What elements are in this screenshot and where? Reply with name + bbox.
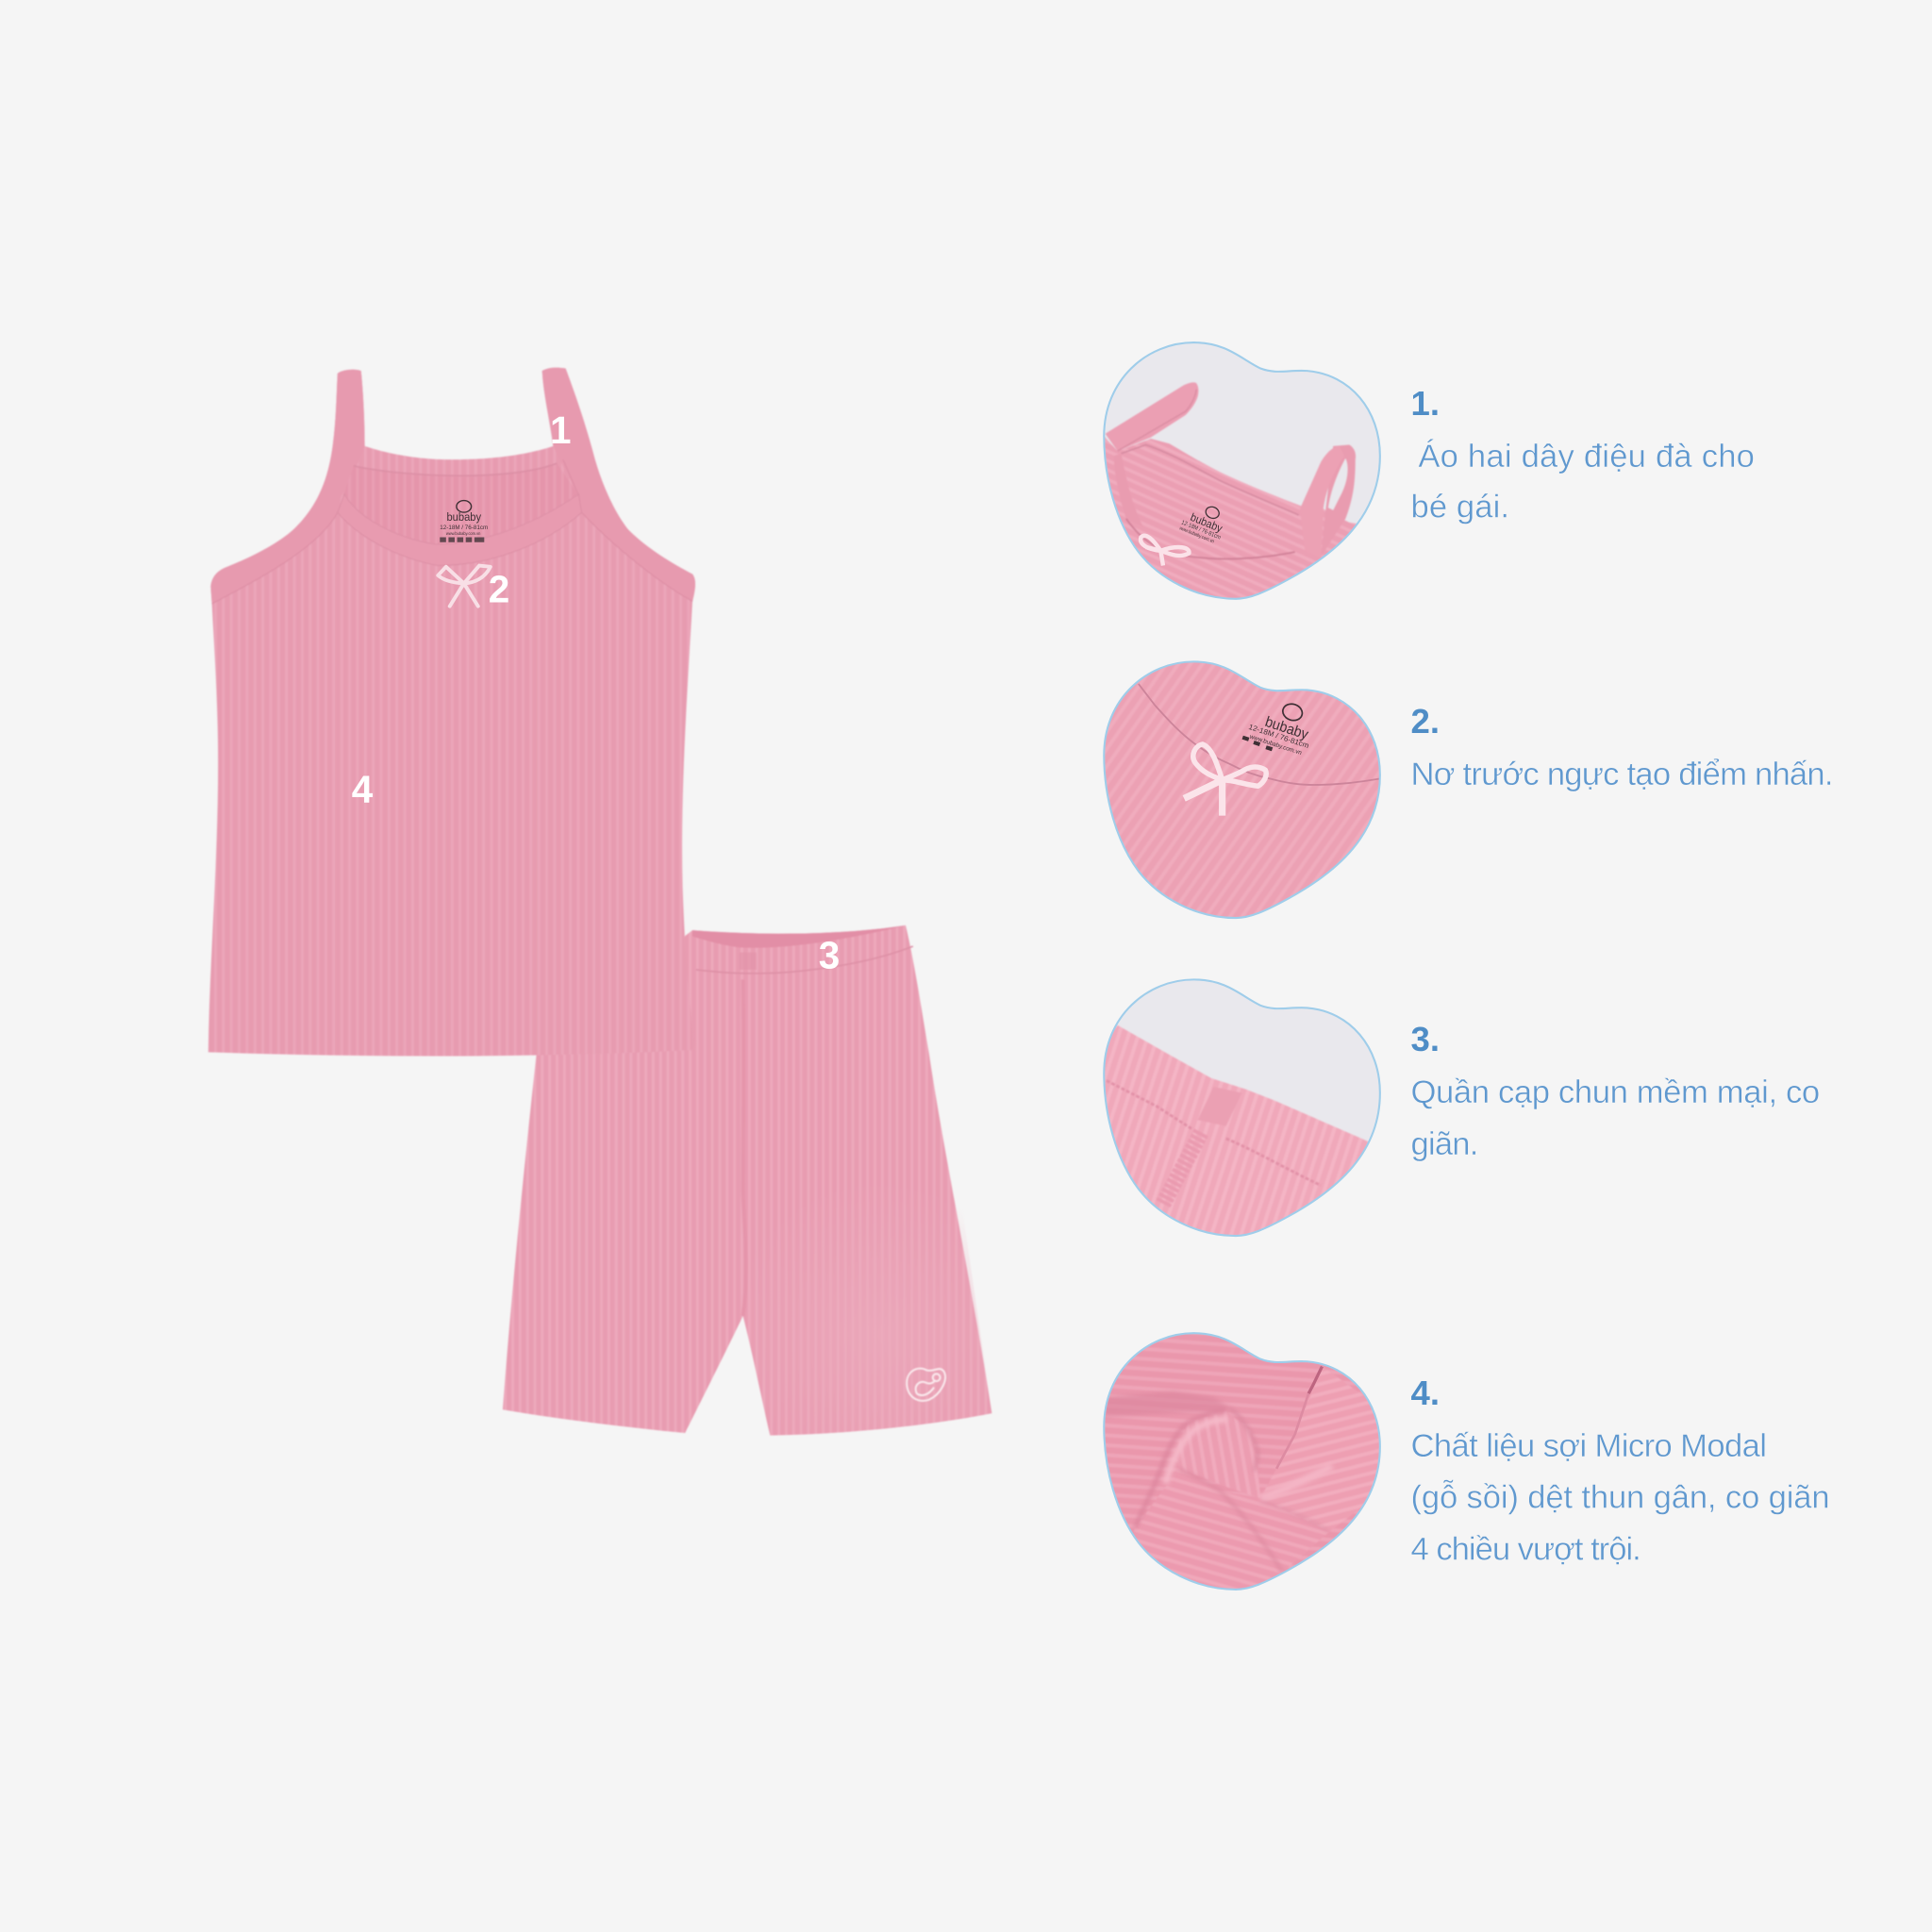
right strap back (1321, 445, 1356, 557)
heart 2: bow detail: bubaby (1263, 714, 1310, 743)
heart 4: fabric swirl (1104, 1333, 1380, 1598)
back waistband (692, 925, 906, 948)
fabric (1104, 436, 1380, 599)
swirl highlights (1260, 1466, 1332, 1498)
heart 1: strap detail (1104, 342, 1380, 599)
center seam (743, 979, 746, 1316)
seam patch (1198, 1087, 1242, 1126)
garment label: bubaby (446, 510, 482, 524)
feature 4 text: Chất liệu sợi Micro Modal (1411, 1428, 1767, 1464)
bow (1193, 744, 1266, 786)
strap gap (1328, 458, 1347, 510)
feature 4 text (1411, 1374, 1830, 1568)
feature 2 text: Nơ trước ngực tạo điểm nhấn. (1411, 757, 1834, 792)
left strap and armhole band (210, 370, 365, 604)
feature 4 text: (gỗ sồi) dệt thun gân, co giãn (1411, 1479, 1830, 1516)
feature 3 text: giãn. (1411, 1126, 1478, 1162)
heart 1: strap detail: 12-18M / 76-81cm (1180, 519, 1222, 541)
icon: bow (438, 566, 491, 607)
heart 2: bow detail (1104, 661, 1380, 918)
feature 3 text (1411, 1020, 1820, 1162)
feature 1 text (1411, 384, 1755, 525)
feature 1 text: 1. (1411, 384, 1440, 423)
feature 3 text: 3. (1411, 1020, 1440, 1058)
label text (1281, 703, 1304, 721)
product marker 3: 3 (819, 934, 840, 977)
right fold (1264, 1372, 1379, 1527)
right strap and armhole band (542, 368, 695, 601)
soft fold shading (1104, 1391, 1332, 1573)
lower fold (1134, 1474, 1327, 1589)
top right crease (1308, 1366, 1322, 1393)
feature 2 text: 2. (1411, 702, 1440, 741)
heart 3: waistband detail (1104, 979, 1380, 1236)
neckline (1139, 684, 1380, 785)
heart 2: bow detail: www.bubaby.com.vn (1248, 733, 1303, 757)
coil highlight (1166, 1420, 1227, 1484)
back neck panel (343, 463, 578, 544)
garment label: www.bubaby.com.vn (446, 531, 481, 536)
side rib band (1114, 455, 1141, 525)
product marker 2: 2 (489, 568, 509, 611)
heart 2: bow detail: 12-18M / 76-81cm (1247, 723, 1310, 750)
front neckline (1126, 519, 1295, 558)
product: camisole top (208, 368, 696, 1057)
crease fade (1276, 1393, 1308, 1469)
neck stitch (1122, 445, 1299, 515)
garment label (440, 501, 488, 542)
front neckline band (338, 494, 581, 566)
feature 1 text: Áo hai dây điệu đà cho (1418, 438, 1755, 475)
left strap (1106, 382, 1198, 451)
centre crease (1230, 1408, 1258, 1472)
lower crease (1179, 1469, 1283, 1573)
icon: shorts logo (907, 1369, 945, 1401)
coil edge (1135, 1411, 1226, 1528)
fabric (1104, 1025, 1380, 1236)
feature 3 text: Quần cạp chun mềm mại, co (1411, 1074, 1820, 1110)
feature 4 text: 4. (1411, 1374, 1440, 1412)
label text (1206, 506, 1220, 519)
bow tails (1184, 780, 1223, 816)
product marker 1: 1 (550, 408, 572, 452)
side seam (1163, 1132, 1201, 1204)
garment label: 12-18M / 76-81cm (440, 525, 488, 531)
back neck stitch (354, 463, 557, 475)
left dark band (1104, 1391, 1230, 1417)
heart 1: strap detail: www.bubaby.com.vn (1178, 525, 1215, 545)
bow (1141, 536, 1189, 566)
product marker 4: 4 (352, 767, 374, 810)
waist seam patch (740, 953, 757, 970)
feature 4 text: 4 chiều vượt trội. (1411, 1532, 1641, 1568)
feature 1 text: bé gái. (1411, 490, 1509, 525)
product: shorts (503, 925, 991, 1436)
lighter lower right leg (743, 1183, 991, 1436)
waistband stitch (696, 946, 913, 974)
heart 1: strap detail: bubaby (1189, 511, 1224, 535)
feature 2 text (1411, 702, 1834, 792)
strap edge lines (212, 459, 692, 604)
right strap front (1300, 448, 1334, 556)
inner coil (1181, 1415, 1260, 1494)
waist stitch (1107, 1080, 1321, 1185)
